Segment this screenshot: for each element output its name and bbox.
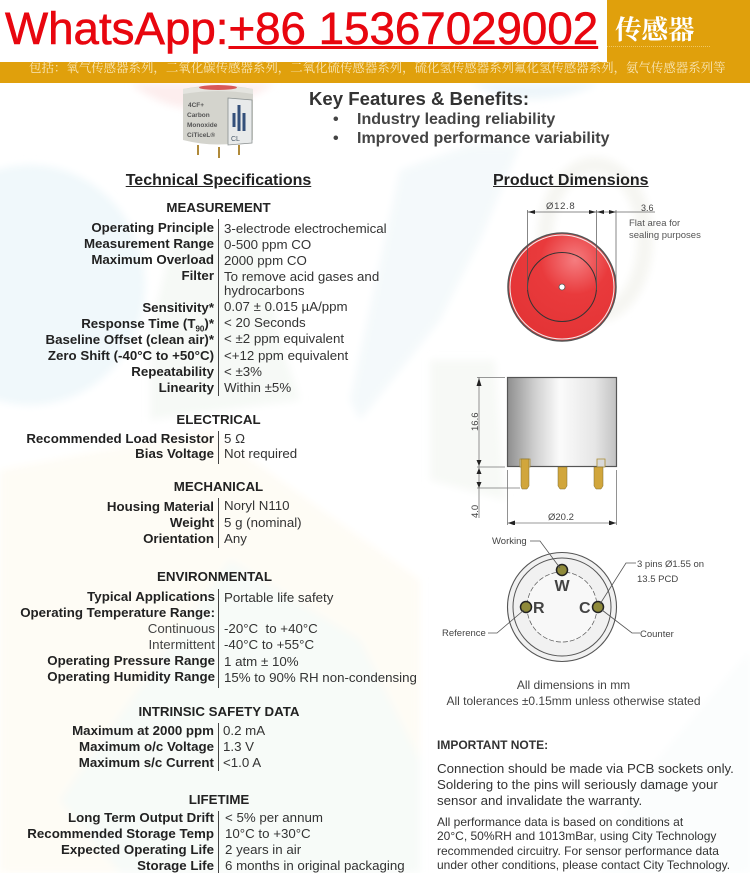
note text: sensor and invalidate the warranty. — [437, 793, 642, 808]
panel: environmental: Portable life safety — [224, 590, 333, 605]
conditions text: recommended circuitry. For sensor performance data — [437, 844, 719, 858]
diagram: pin layout — [442, 536, 704, 662]
panel: lifetime: 6 months in original packaging — [225, 858, 405, 873]
panel: mechanical: Housing Material — [107, 499, 214, 514]
features list: Industry leading reliability — [357, 111, 555, 128]
panel: electrical — [26, 412, 297, 464]
diagram: side view: 4.0 — [470, 505, 481, 518]
diagram: side view: Ø20.2 — [548, 512, 574, 523]
panel: electrical: Bias Voltage — [135, 446, 214, 461]
dimension notes — [446, 678, 701, 708]
panel: lifetime: Expected Operating Life — [61, 842, 214, 857]
diagram: side view: 16.6 — [470, 412, 481, 431]
conditions text — [437, 815, 730, 872]
panel: lifetime — [27, 792, 405, 873]
features list: • — [333, 130, 339, 147]
panel: measurement: 0-500 ppm CO — [224, 236, 311, 252]
panel: measurement: Within ±5% — [224, 380, 291, 395]
panel: measurement: < ±2 ppm equivalent — [224, 331, 344, 346]
panel: lifetime: Long Term Output Drift — [68, 810, 214, 825]
panel: intrinsic safety data: Maximum o/c Voltage — [79, 739, 214, 754]
panel: measurement: <+12 ppm equivalent — [224, 348, 348, 363]
dotted rule — [607, 46, 710, 47]
panel: environmental: 1 atm ± 10% — [224, 654, 299, 669]
icon: sensor photo: Monoxide — [187, 122, 218, 129]
product dimensions title: Product Dimensions — [493, 172, 649, 189]
features list — [333, 111, 610, 147]
heading: ENVIRONMENTAL — [157, 569, 272, 584]
panel: measurement: Measurement Range — [84, 236, 214, 251]
panel: measurement: < 20 Seconds — [224, 315, 306, 330]
panel: mechanical: Orientation — [143, 531, 214, 546]
dimension notes: All dimensions in mm — [517, 678, 630, 692]
heading: ELECTRICAL — [176, 412, 261, 427]
panel: measurement: Sensitivity* — [142, 300, 214, 315]
heading: LIFETIME — [189, 792, 249, 807]
diagram: pin layout: 3 pins Ø1.55 on — [637, 559, 704, 570]
icon: sensor photo: CL — [231, 136, 240, 143]
panel: environmental: Intermittent — [148, 637, 215, 652]
key features — [309, 88, 610, 147]
note text — [437, 761, 734, 808]
panel: environmental: Operating Temperature Range: — [20, 605, 215, 620]
important note — [437, 738, 734, 872]
panel: measurement: hydrocarbons — [224, 283, 305, 298]
panel: electrical: Recommended Load Resistor — [26, 431, 214, 446]
panel: measurement: Linearity — [159, 380, 214, 395]
header gold tab — [607, 0, 750, 62]
panel: intrinsic safety data: Maximum at 2000 ppm — [72, 723, 214, 738]
note text: Soldering to the pins will seriously damage your — [437, 777, 718, 792]
diagram: top view: Flat area for — [629, 218, 680, 229]
panel: environmental: Typical Applications — [87, 589, 215, 604]
note text: Connection should be made via PCB sockets only. — [437, 761, 734, 776]
panel: measurement: Maximum Overload — [91, 252, 214, 267]
panel: lifetime: 2 years in air — [225, 842, 301, 857]
panel: mechanical: Noryl N110 — [224, 498, 290, 513]
panel: environmental: Operating Humidity Range — [47, 669, 215, 684]
panel: electrical: Not required — [224, 446, 297, 461]
heading: MECHANICAL — [174, 479, 263, 494]
technical specifications title: Technical Specifications — [126, 172, 311, 189]
sensor label: 传感器 — [615, 8, 694, 47]
diagram: pin layout: C — [579, 600, 591, 617]
panel: mechanical: 5 g (nominal) — [224, 515, 302, 530]
panel: lifetime: Storage Life — [137, 858, 214, 873]
panel: intrinsic safety data: 0.2 mA — [223, 723, 265, 738]
conditions text: All performance data is based on conditions at — [437, 815, 683, 829]
diagram: top view — [507, 201, 701, 342]
panel: measurement: Response Time (T90)* — [81, 316, 214, 334]
diagram: pin layout: Counter — [640, 629, 674, 640]
panel: lifetime: Recommended Storage Temp — [27, 826, 214, 841]
panel: mechanical: Weight — [170, 515, 214, 530]
features list: Improved performance variability — [357, 130, 610, 147]
diagram: top view: 3.6 — [641, 203, 654, 213]
panel: intrinsic safety data: 1.3 V — [223, 739, 254, 754]
whatsapp contact: WhatsApp:+86 15367029002 — [5, 3, 598, 54]
diagram: side view — [470, 376, 618, 525]
panel: measurement: Baseline Offset (clean air)* — [46, 332, 214, 347]
diagram: top view: Ø12.8 — [546, 201, 575, 212]
icon: sensor photo: CiTiceL® — [187, 131, 215, 139]
panel: measurement: 2000 ppm CO — [224, 252, 307, 268]
panel: environmental: -40°C to +55°C — [224, 637, 314, 652]
diagram: pin layout: Reference — [442, 628, 486, 639]
panel: intrinsic safety data: Maximum s/c Current — [79, 755, 214, 770]
panel: environmental: Operating Pressure Range — [47, 653, 215, 668]
features heading: Key Features & Benefits: — [309, 88, 529, 109]
panel: lifetime: 10°C to +30°C — [225, 826, 311, 841]
dimension notes: All tolerances ±0.15mm unless otherwise stated — [446, 694, 701, 708]
header white banner — [0, 0, 607, 62]
diagram: top view: sealing purposes — [629, 230, 701, 241]
panel: measurement: 3-electrode electrochemical — [224, 220, 387, 236]
panel: electrical: 5 Ω — [224, 431, 245, 446]
panel: measurement: Operating Principle — [91, 220, 214, 235]
icon: sensor photo — [183, 85, 253, 158]
heading: MEASUREMENT — [166, 200, 271, 215]
diagram: pin layout: W — [554, 578, 570, 595]
panel: measurement: Filter — [181, 268, 214, 283]
panel: mechanical: Any — [224, 531, 247, 546]
conditions text: 20°C, 50%RH and 1013mBar, using City Technology — [437, 829, 716, 843]
conditions text: under other conditions, please contact City Technology. — [437, 858, 730, 872]
panel: environmental — [20, 569, 417, 688]
heading: INTRINSIC SAFETY DATA — [138, 704, 300, 719]
icon: sensor photo: 4CF+ — [188, 102, 204, 109]
diagram: pin layout: R — [533, 600, 545, 617]
diagram: pin layout: 13.5 PCD — [637, 574, 678, 585]
panel: measurement: Zero Shift (-40°C to +50°C) — [48, 348, 214, 363]
note heading: IMPORTANT NOTE: — [437, 738, 548, 752]
panel: intrinsic safety data: <1.0 A — [223, 755, 261, 770]
panel: lifetime: < 5% per annum — [225, 810, 323, 825]
panel: measurement: 0.07 ± 0.015 µA/ppm — [224, 299, 348, 314]
features list: • — [333, 111, 339, 128]
panel: environmental: -20°C to +40°C — [224, 621, 318, 636]
diagram: pin layout: Working — [492, 536, 527, 547]
icon: sensor photo: Carbon — [187, 112, 210, 119]
panel: mechanical — [107, 479, 302, 548]
panel: measurement: < ±3% — [224, 364, 262, 379]
panel: environmental: 15% to 90% RH non-condensing — [224, 670, 417, 685]
header gold strip — [0, 62, 750, 83]
panel: intrinsic safety data — [72, 704, 300, 771]
panel: measurement — [46, 200, 387, 396]
panel: environmental: Continuous — [148, 621, 215, 636]
panel: measurement: To remove acid gases and — [224, 269, 379, 284]
panel: measurement: Repeatability — [131, 364, 214, 379]
